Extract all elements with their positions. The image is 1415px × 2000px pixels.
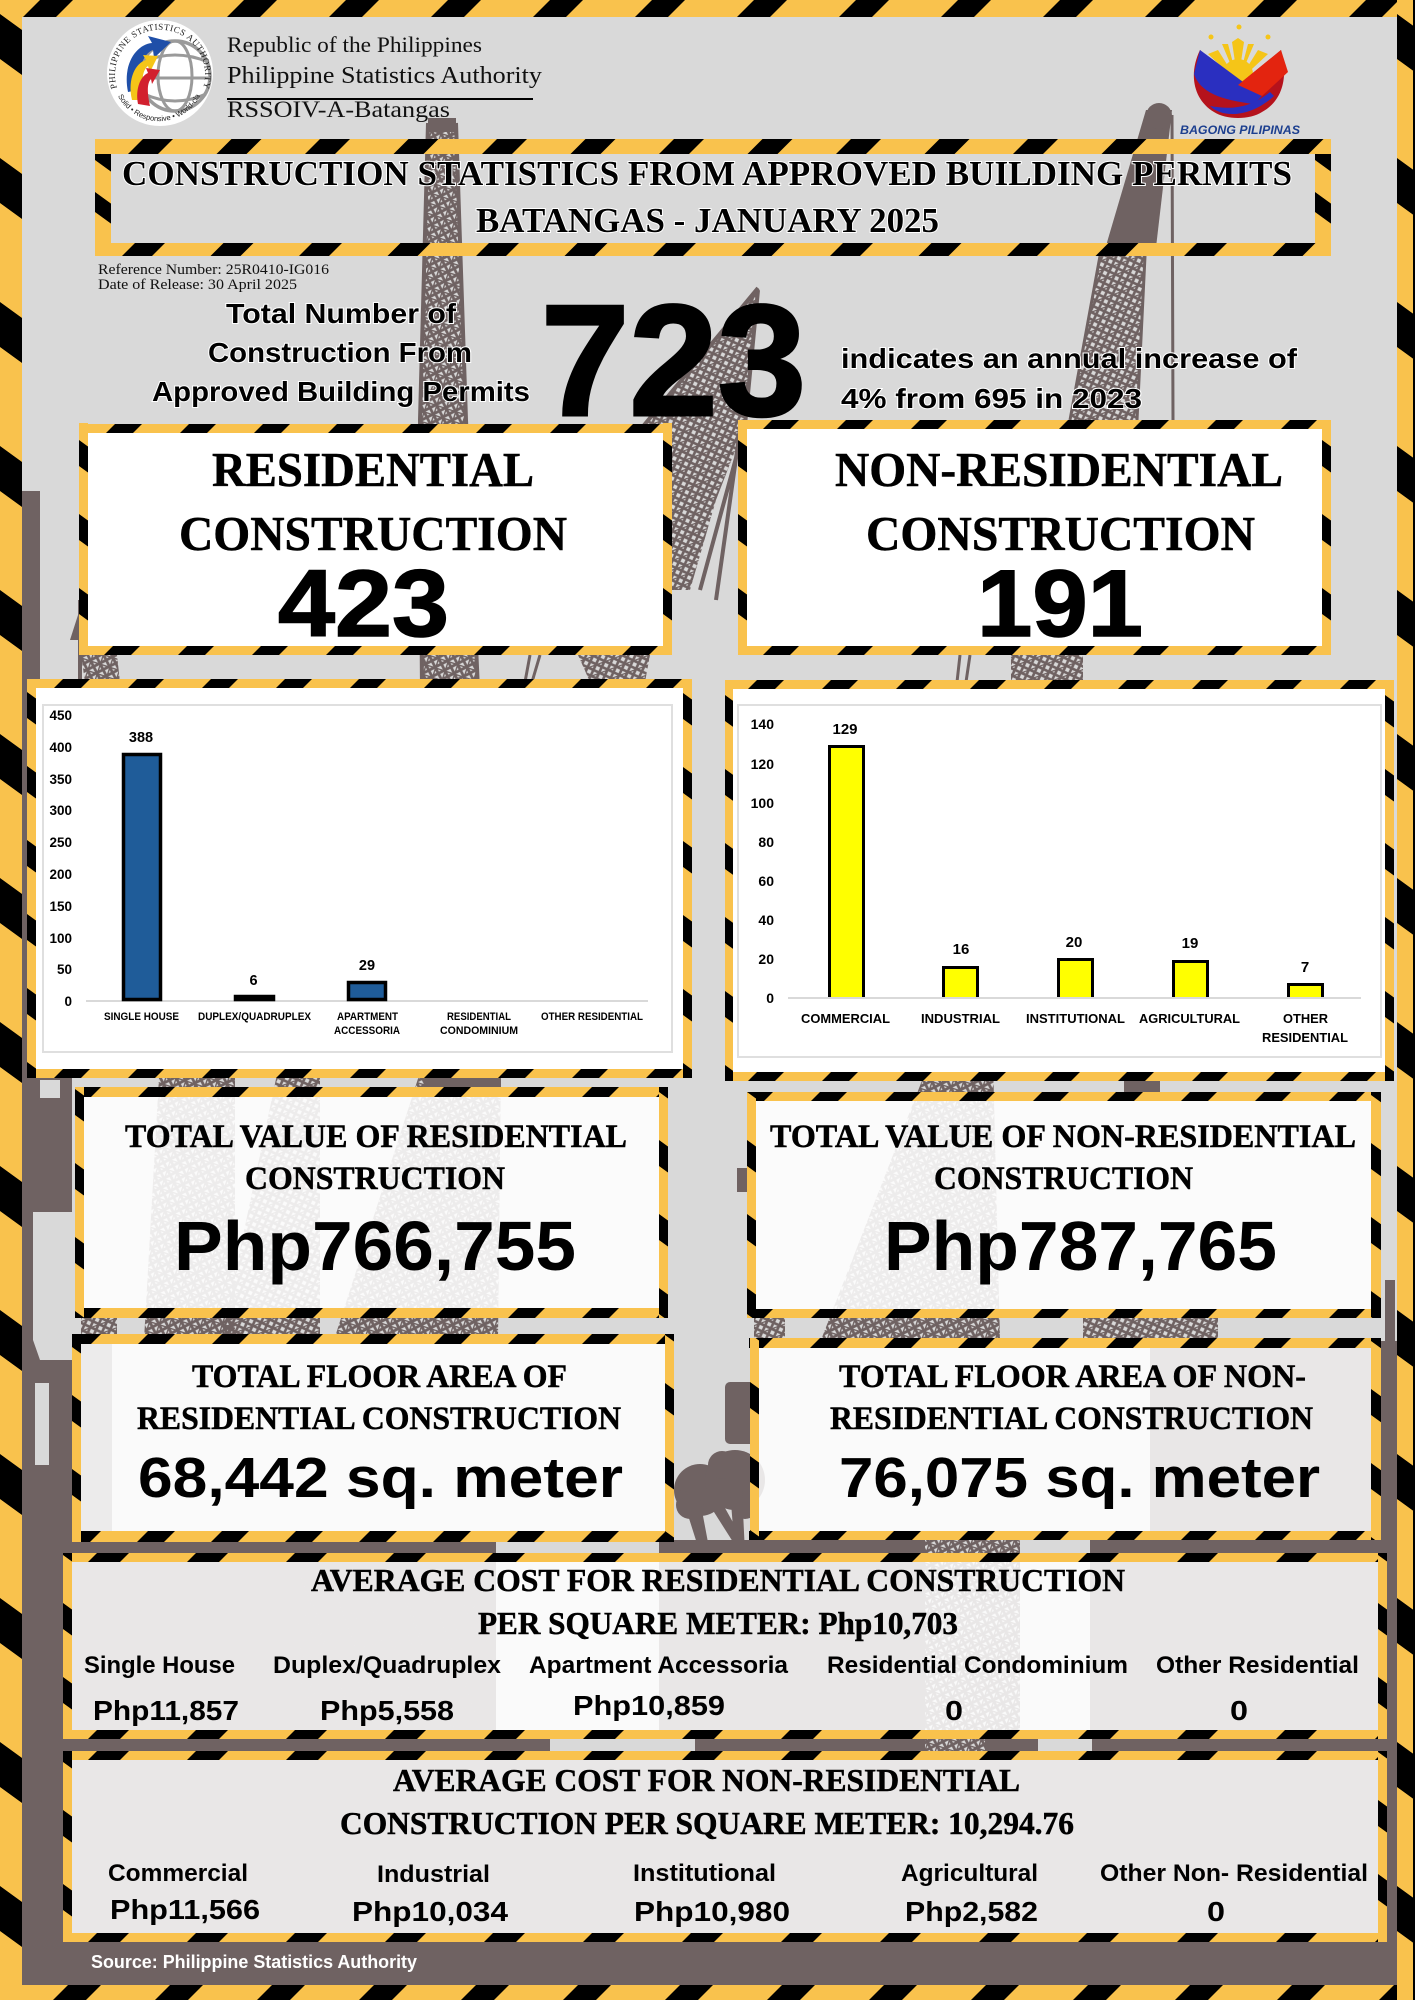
value labels: 29 <box>359 958 375 974</box>
cost values: Php10,859 <box>573 1690 725 1721</box>
icon: Bagong Pilipinas logo: BAGONG PILIPINAS <box>1180 123 1300 137</box>
value labels: 20 <box>1066 934 1082 951</box>
total construction number: 723 <box>541 273 806 449</box>
title panel <box>95 139 1331 256</box>
background: light cut-outs in the brown column <box>33 1080 1092 1751</box>
icon: Philippine Statistics Authority logo <box>107 20 213 126</box>
panel: total floor area of non-residential construction: RESIDENTIAL CONSTRUCTION <box>830 1401 1313 1437</box>
panel: total floor area of non-residential construction <box>749 1338 1381 1540</box>
panel: average cost for residential construction <box>63 1553 1387 1739</box>
y axis labels: 120 <box>751 756 774 772</box>
panel: residential bar chart <box>27 679 692 1078</box>
value labels: 388 <box>129 730 153 746</box>
reference number and release date: Date of Release: 30 April 2025 <box>98 277 297 293</box>
reference number and release date: Reference Number: 25R0410-IG016 <box>98 262 330 278</box>
panel: non-residential construction count: CONSTRUCTION <box>866 506 1255 561</box>
category labels: RESIDENTIAL <box>1262 1030 1348 1045</box>
reference number and release date <box>98 262 330 293</box>
cost values <box>93 1690 1248 1726</box>
panel: total floor area of non-residential construction: 76,075 sq. meter <box>839 1446 1320 1510</box>
category labels: CONDOMINIUM <box>440 1025 518 1037</box>
total construction label: Total Number of <box>226 298 457 329</box>
background: crane boom centre <box>525 288 758 682</box>
y axis labels: 100 <box>49 931 72 946</box>
panel: total floor area of non-residential construction: TOTAL FLOOR AREA OF NON- <box>839 1359 1306 1395</box>
cost values: 0 <box>1207 1896 1225 1927</box>
y axis labels: 60 <box>758 873 774 889</box>
header: agency text block <box>227 32 542 122</box>
panel: residential construction count: CONSTRUCTION <box>179 506 567 561</box>
icon: Philippine Statistics Authority logo: PHILIPPINE STATISTICS AUTHORITY <box>109 24 211 90</box>
category labels <box>84 1652 1359 1679</box>
category labels: AGRICULTURAL <box>1139 1011 1240 1026</box>
category labels: ACCESSORIA <box>334 1025 400 1037</box>
cost values: Php10,980 <box>634 1896 790 1927</box>
y axis labels: 200 <box>49 867 72 882</box>
total construction label <box>152 298 530 407</box>
y axis labels <box>751 716 774 1006</box>
panel: average cost for non-residential construction: AVERAGE COST FOR NON-RESIDENTIAL <box>393 1762 1020 1798</box>
bars <box>124 754 386 1000</box>
panel: non-residential bar chart <box>725 680 1394 1081</box>
title text <box>122 154 1292 240</box>
title text: CONSTRUCTION STATISTICS FROM APPROVED BUILDING PERMITS <box>122 154 1292 193</box>
y axis labels: 450 <box>49 708 72 723</box>
panel: non-residential construction count: NON-RESIDENTIAL <box>835 442 1283 497</box>
panel: total floor area of residential construction <box>72 1334 674 1542</box>
y axis labels <box>49 708 72 1009</box>
value labels: 129 <box>832 721 858 738</box>
category labels: OTHER RESIDENTIAL <box>541 1011 643 1023</box>
cost values: 0 <box>945 1695 963 1726</box>
y axis labels: 0 <box>64 994 72 1009</box>
cost values: Php10,034 <box>352 1896 508 1927</box>
panel: total floor area of residential construction: TOTAL FLOOR AREA OF <box>192 1359 567 1395</box>
y axis labels: 40 <box>758 912 774 928</box>
cost values <box>110 1894 1225 1927</box>
category labels: Institutional <box>633 1860 776 1887</box>
value labels: 6 <box>249 973 258 989</box>
category labels: INDUSTRIAL <box>921 1011 1000 1026</box>
value labels: 16 <box>953 941 969 958</box>
y axis labels: 300 <box>49 803 72 818</box>
category labels: DUPLEX/QUADRUPLEX <box>198 1011 312 1023</box>
panel: average cost for non-residential construction: CONSTRUCTION PER SQUARE METER: 10,294.76 <box>340 1805 1074 1841</box>
background: lower brown ground areas <box>22 491 1397 1985</box>
panel: non-residential construction count: 191 <box>977 551 1143 657</box>
background: crane mast left <box>420 118 478 690</box>
panel: total value of residential construction: Php766,755 <box>174 1207 576 1285</box>
total construction label: Approved Building Permits <box>152 376 530 407</box>
y axis labels: 100 <box>751 795 774 811</box>
background: crane boom right <box>957 103 1173 682</box>
panel: total value of non-residential construction <box>747 1092 1381 1318</box>
category labels <box>801 1011 1348 1045</box>
category labels: APARTMENT <box>337 1011 398 1023</box>
header: agency text block: RSSOIV-A-Batangas <box>227 97 450 122</box>
y axis labels: 400 <box>49 740 72 755</box>
y axis labels: 250 <box>49 835 72 850</box>
panel: total value of non-residential construction: TOTAL VALUE OF NON-RESIDENTIAL <box>770 1119 1356 1155</box>
category labels: Single House <box>84 1652 235 1679</box>
category labels: Commercial <box>108 1860 248 1887</box>
panel: total value of non-residential construction: Php787,765 <box>884 1207 1277 1285</box>
bars <box>830 746 1322 997</box>
category labels: Other Residential <box>1156 1652 1359 1679</box>
category labels <box>104 1011 643 1037</box>
annual increase note: indicates an annual increase of <box>841 343 1298 374</box>
value labels <box>129 730 375 989</box>
panel: total value of residential construction: TOTAL VALUE OF RESIDENTIAL <box>125 1119 627 1155</box>
panel: average cost for non-residential construction <box>63 1751 1387 1942</box>
panel: non-residential construction count <box>738 420 1331 657</box>
category labels: Apartment Accessoria <box>529 1652 789 1679</box>
category labels: Duplex/Quadruplex <box>273 1652 502 1679</box>
cost values: Php11,857 <box>93 1695 239 1726</box>
header: agency text block: Philippine Statistics Authority <box>227 63 542 89</box>
panel: residential construction count <box>79 423 672 657</box>
panel: average cost for residential construction: AVERAGE COST FOR RESIDENTIAL CONSTRUCTION <box>311 1562 1125 1598</box>
category labels: Industrial <box>377 1861 490 1888</box>
category labels: Agricultural <box>901 1860 1038 1887</box>
y axis labels: 50 <box>57 962 72 977</box>
value labels <box>832 721 1309 976</box>
icon: Bagong Pilipinas logo <box>1180 24 1300 137</box>
cost values: 0 <box>1230 1695 1248 1726</box>
value labels: 7 <box>1301 959 1309 976</box>
category labels: Other Non- Residential <box>1100 1860 1368 1887</box>
annual increase note: 4% from 695 in 2023 <box>841 383 1142 414</box>
category labels: SINGLE HOUSE <box>104 1011 179 1023</box>
category labels: RESIDENTIAL <box>447 1011 511 1023</box>
panel: residential construction count: RESIDENTIAL <box>212 442 534 497</box>
title text: BATANGAS - JANUARY 2025 <box>476 201 939 240</box>
panel: residential construction count: 423 <box>278 551 449 657</box>
y axis labels: 80 <box>758 834 774 850</box>
y axis labels: 150 <box>49 899 72 914</box>
y axis labels: 0 <box>766 990 774 1006</box>
y axis labels: 140 <box>751 716 774 732</box>
panel: total floor area of residential construction: RESIDENTIAL CONSTRUCTION <box>137 1401 621 1437</box>
y axis labels: 350 <box>49 772 72 787</box>
panel: total floor area of residential construction: 68,442 sq. meter <box>138 1446 623 1510</box>
panel: total value of residential construction: CONSTRUCTION <box>245 1161 505 1197</box>
background: lower crane lattices <box>81 655 1218 1940</box>
category labels: OTHER <box>1283 1011 1329 1026</box>
category labels: Residential Condominium <box>827 1652 1128 1679</box>
annual increase note <box>841 343 1298 414</box>
cost values: Php2,582 <box>905 1896 1038 1927</box>
source note: Source: Philippine Statistics Authority <box>91 1952 417 1972</box>
header: agency text block: Republic of the Philippines <box>227 32 482 57</box>
cost values: Php5,558 <box>320 1695 454 1726</box>
category labels: INSTITUTIONAL <box>1026 1011 1125 1026</box>
category labels: COMMERCIAL <box>801 1011 890 1026</box>
cost values: Php11,566 <box>110 1894 260 1925</box>
total construction label: Construction From <box>208 337 472 368</box>
category labels <box>108 1860 1368 1888</box>
panel: total value of non-residential construction: CONSTRUCTION <box>934 1161 1193 1197</box>
panel: average cost for residential construction: PER SQUARE METER: Php10,703 <box>478 1605 958 1641</box>
value labels: 19 <box>1182 935 1198 952</box>
panel: total value of residential construction <box>75 1087 668 1318</box>
y axis labels: 20 <box>758 951 774 967</box>
